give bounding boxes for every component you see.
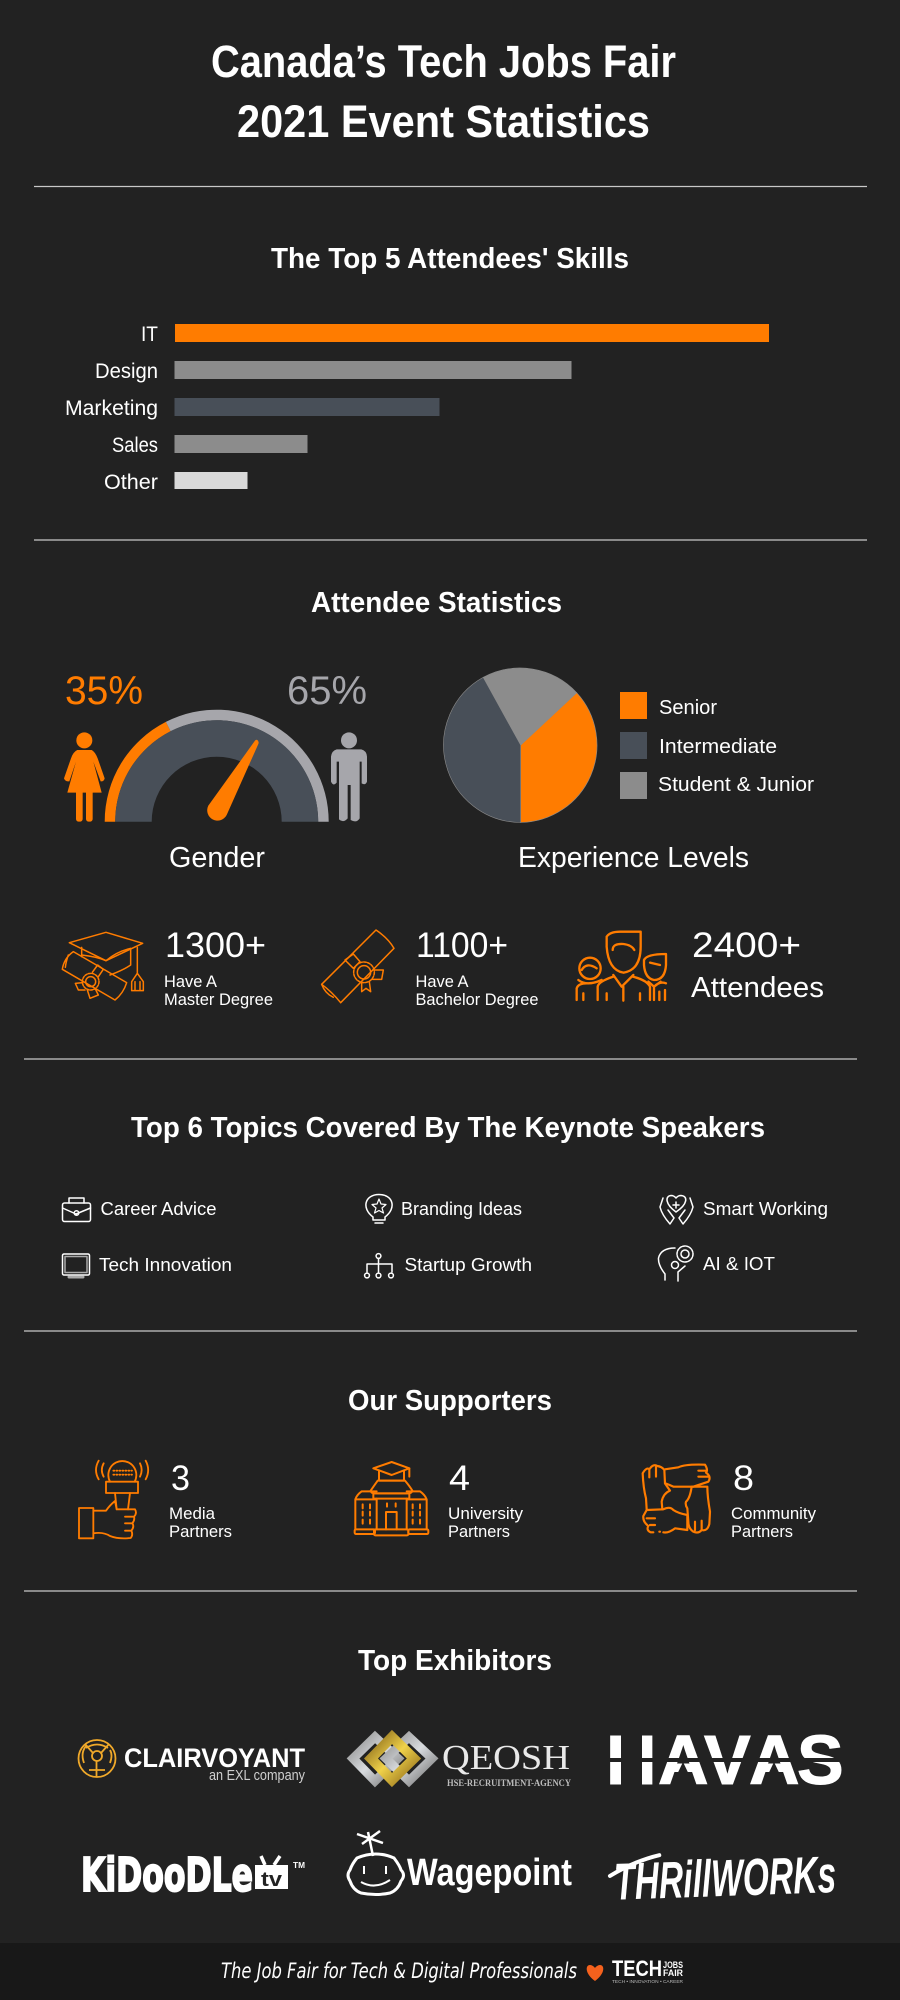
title: 2021 Event Statistics: [237, 96, 650, 147]
stat: bachelor degree: [322, 926, 538, 1009]
value: 3: [171, 1459, 190, 1498]
icon: man: [331, 732, 367, 821]
pie chart: [444, 668, 597, 822]
caption: Partners: [448, 1522, 510, 1541]
footer tagline: The Job Fair for Tech & Digital Professionals: [221, 1959, 577, 1983]
stat: attendees: [577, 926, 824, 1004]
caption: University: [448, 1504, 524, 1523]
topic: branding ideas: Branding Ideas: [401, 1198, 522, 1219]
logo: Havas: HAVAS: [606, 1721, 844, 1799]
label: experience levels: Experience Levels: [518, 842, 749, 874]
legend: Intermediate: [659, 736, 777, 758]
icon: university building: [355, 1462, 428, 1535]
topic: AI and IOT: [658, 1246, 775, 1281]
logo: Tech Jobs Fair: JOBS: [663, 1960, 683, 1970]
logo: QEOSH: QEOSH: [442, 1738, 570, 1777]
caption: [169, 1504, 232, 1541]
icon: woman: [64, 732, 105, 822]
topic: startup growth: Startup Growth: [404, 1254, 532, 1275]
caption: Media: [169, 1504, 216, 1523]
caption: Community: [731, 1504, 816, 1523]
logo: Tech Jobs Fair: TECH • INNOVATION • CAREER: [612, 1979, 684, 1984]
experience levels pie: [444, 668, 814, 874]
value: 2400+: [692, 926, 801, 965]
caption: Master Degree: [164, 991, 273, 1009]
logo: Clairvoyant: [78, 1740, 306, 1784]
heading: top 5 skills: The Top 5 Attendees' Skills: [271, 243, 629, 275]
value: 1100+: [416, 926, 508, 965]
topic: startup growth: [365, 1254, 532, 1278]
logo: Wagepoint: [348, 1831, 572, 1894]
bar: Marketing: [65, 397, 440, 420]
heading: top exhibitors: Top Exhibitors: [358, 1645, 552, 1677]
footer band: [0, 1943, 900, 2000]
logo: Kidoodle TV: TM: [293, 1861, 305, 1870]
logo: QEOSH: [353, 1737, 571, 1789]
title: Canada’s Tech Jobs Fair: [211, 36, 676, 87]
caption: Have A: [416, 973, 468, 991]
topic: tech innovation: Tech Innovation: [99, 1254, 232, 1275]
topic: smart working: [660, 1196, 828, 1224]
gender gauge: [64, 669, 367, 874]
bar: Other: [104, 471, 248, 494]
caption: Bachelor Degree: [416, 991, 538, 1009]
icon: people: [577, 932, 666, 1001]
bar: Design: Design: [95, 360, 158, 383]
supporter: media partners: [79, 1459, 232, 1541]
icon: heart: [587, 1965, 603, 1981]
bar: Sales: Sales: [112, 434, 158, 457]
value: 8: [733, 1459, 754, 1498]
logo: Clairvoyant: CLAIRVOYANT: [124, 1743, 305, 1773]
topic: branding ideas: [366, 1194, 522, 1223]
caption: Partners: [169, 1522, 232, 1541]
value: 4: [449, 1459, 470, 1498]
legend: Student & Junior: [658, 774, 814, 796]
bar chart: skills: [65, 323, 769, 494]
logo: Clairvoyant: an EXL company: [209, 1768, 306, 1784]
label: gender: Gender: [169, 842, 265, 874]
caption: Have A: [164, 973, 217, 991]
icon: diploma: [322, 930, 394, 1003]
stat: master degree: [62, 926, 273, 1009]
percent: male: 65%: [287, 669, 367, 713]
legend: [620, 692, 814, 799]
caption: [731, 1504, 816, 1541]
percent: female: 35%: [65, 669, 143, 713]
gauge arcs: [105, 710, 329, 822]
legend: Senior: [659, 697, 717, 719]
supporter: community partners: [643, 1459, 816, 1541]
topic: tech innovation: [62, 1254, 232, 1277]
caption: [164, 973, 273, 1009]
logo: Kidoodle TV: tv: [261, 1869, 283, 1891]
icon: linked hands: [643, 1465, 710, 1533]
value: 1300+: [165, 926, 266, 965]
caption: Partners: [731, 1522, 793, 1541]
topic: AI and IOT: AI & IOT: [703, 1253, 775, 1274]
caption: [416, 973, 538, 1009]
bar: IT: [141, 323, 769, 346]
topic: smart working: Smart Working: [703, 1198, 828, 1219]
topics list: [62, 1194, 828, 1281]
topic: career advice: Career Advice: [100, 1198, 216, 1219]
icon: graduation cap and diploma: [62, 932, 143, 1000]
icon: microphone in hand: [79, 1461, 148, 1538]
topic: career advice: [62, 1198, 216, 1222]
caption: [448, 1504, 524, 1541]
logo: Tech Jobs Fair: FAIR: [663, 1968, 683, 1978]
bar: Design: [95, 360, 572, 383]
logo: Tech Jobs Fair: TECH: [612, 1956, 662, 1981]
bar: Other: Other: [104, 471, 158, 494]
logo: Wagepoint: Wagepoint: [407, 1852, 572, 1894]
bar: Sales: [112, 434, 308, 457]
title: [211, 36, 676, 147]
bar: IT: IT: [141, 323, 158, 346]
logo: QEOSH: HSE-RECRUITMENT-AGENCY: [447, 1779, 571, 1789]
caption: Attendees: [691, 972, 824, 1004]
heading: our supporters: Our Supporters: [348, 1385, 552, 1417]
gauge needle: [207, 740, 259, 821]
logo: Kidoodle TV: KiDooDLe: [81, 1848, 253, 1902]
heading: keynote topics: Top 6 Topics Covered By The Keynote Speakers: [131, 1112, 765, 1144]
heading: attendee statistics: Attendee Statistics: [311, 587, 562, 619]
bar: Marketing: Marketing: [65, 397, 158, 420]
supporter: university partners: [355, 1459, 524, 1541]
